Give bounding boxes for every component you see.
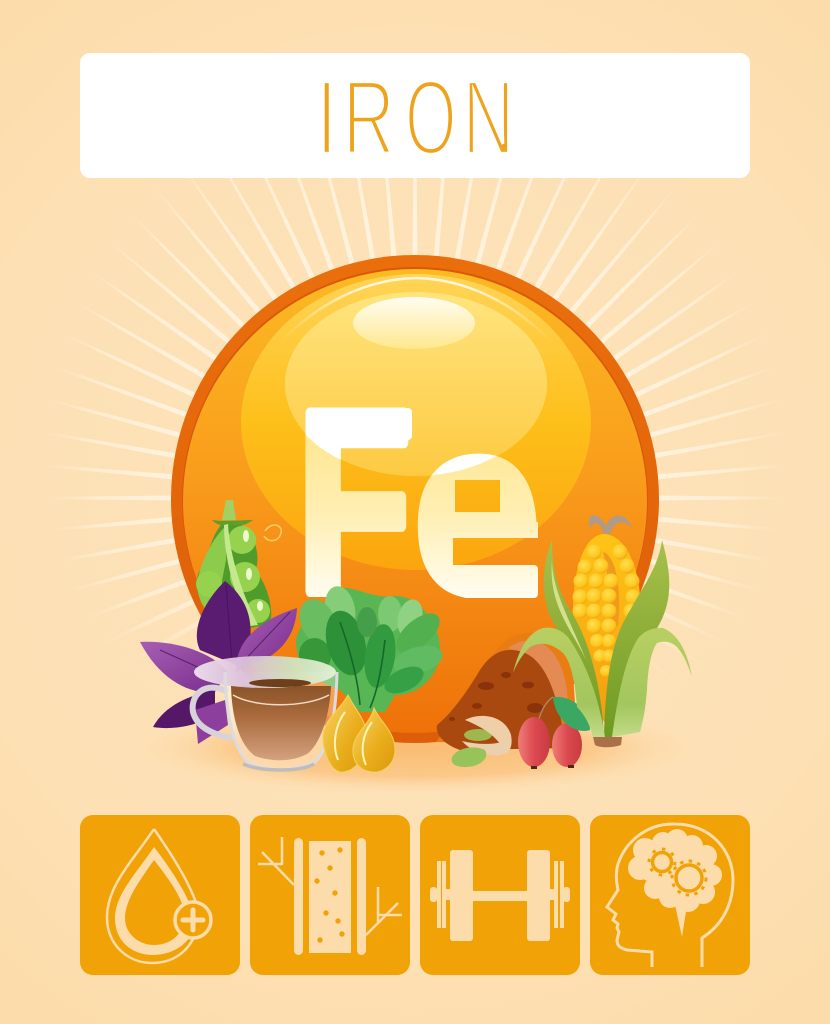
gloss highlight — [353, 297, 475, 349]
title: IRON — [316, 58, 514, 177]
benefit tile: bone structure — [250, 815, 410, 975]
food: glass cup of tea — [193, 656, 337, 770]
food: green peas — [196, 500, 281, 628]
food: corn leaves — [513, 540, 692, 747]
benefit tile: blood drop — [80, 815, 240, 975]
food: cocoa powder pile — [436, 633, 578, 750]
food: corn cob — [572, 515, 640, 725]
food: red berries — [518, 697, 590, 769]
ground shadow — [120, 700, 710, 796]
title: IRON: R — [343, 59, 395, 177]
food: pistachio — [452, 716, 512, 767]
title: IRON: I — [316, 58, 337, 177]
element symbol: Fe — [305, 408, 538, 598]
element symbol: Fe: F — [297, 357, 411, 646]
title banner — [80, 53, 750, 178]
benefit tile: dumbbell — [420, 815, 580, 975]
food: purple basil — [140, 581, 297, 744]
title: IRON: O — [405, 58, 457, 177]
sun rays behind the sphere — [59, 178, 771, 660]
food: spinach — [292, 584, 446, 712]
food: pumpkin seeds — [323, 695, 395, 772]
benefit tile: brain and gears — [590, 815, 750, 975]
mineral sphere — [171, 255, 659, 743]
element symbol: Fe: e — [414, 369, 539, 643]
title: IRON: N — [462, 59, 514, 177]
